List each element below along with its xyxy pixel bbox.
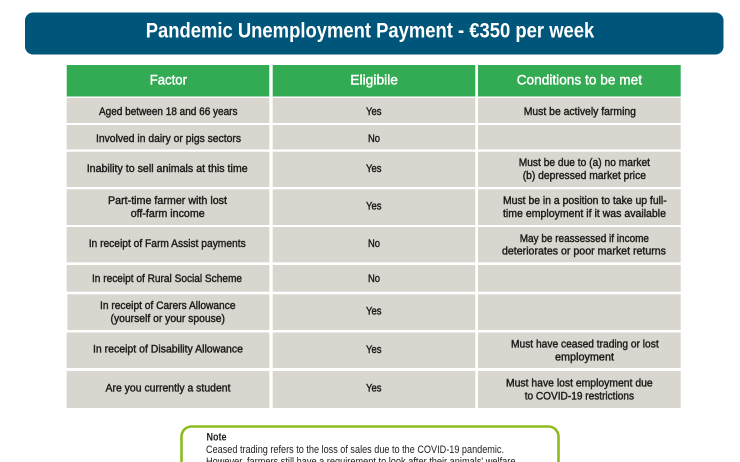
row: farm assist: No xyxy=(368,238,380,250)
row: farm assist: May be reassessed if income xyxy=(520,233,649,245)
row: student: to COVID-19 restrictions xyxy=(525,390,634,402)
eligibility table xyxy=(67,65,681,408)
row: rural social scheme xyxy=(67,265,681,292)
title banner xyxy=(25,12,724,54)
row: aged: Yes xyxy=(366,106,382,118)
note callout: Ceased trading refers to the loss of sales due to the COVID-19 pandemic. xyxy=(206,444,504,456)
row: student: Are you currently a student xyxy=(106,382,230,394)
row: aged xyxy=(67,98,681,123)
row: dairy or pigs: No xyxy=(368,133,380,145)
row: part-time farmer: Yes xyxy=(366,200,382,212)
table header row: Factor xyxy=(150,72,187,88)
row: dairy or pigs: Involved in dairy or pigs sectors xyxy=(96,133,241,145)
row: inability to sell: (b) depressed market price xyxy=(523,170,646,182)
row: inability to sell: Yes xyxy=(366,163,382,175)
row: inability to sell xyxy=(67,152,681,187)
row: inability to sell: Inability to sell animals at this time xyxy=(87,163,248,175)
row: aged: Aged between 18 and 66 years xyxy=(99,106,238,118)
row: carers allowance: (yourself or your spouse) xyxy=(110,313,225,325)
row: part-time farmer: Part-time farmer with lost xyxy=(108,195,227,207)
title banner: Pandemic Unemployment Payment - €350 per week xyxy=(146,20,595,43)
row: aged: Must be actively farming xyxy=(524,106,636,118)
row: disability allowance: Must have ceased trading or lost xyxy=(511,338,659,350)
row: student: Must have lost employment due xyxy=(506,378,653,390)
note callout: Note xyxy=(206,432,226,444)
note callout xyxy=(182,426,558,462)
table header row xyxy=(67,65,681,96)
row: dairy or pigs xyxy=(67,125,681,150)
row: part-time farmer: off-farm income xyxy=(131,208,205,220)
row: part-time farmer: time employment if it was available xyxy=(503,208,666,220)
row: rural social scheme: No xyxy=(368,273,380,285)
row: part-time farmer xyxy=(67,189,681,225)
row: farm assist xyxy=(67,227,681,262)
row: disability allowance: employment xyxy=(555,351,614,363)
row: carers allowance: In receipt of Carers Allowance xyxy=(100,300,236,312)
row: disability allowance: Yes xyxy=(366,344,382,356)
row: carers allowance: Yes xyxy=(366,306,382,318)
row: rural social scheme: In receipt of Rural Social Scheme xyxy=(92,273,242,285)
table header row: Conditions to be met xyxy=(517,72,642,88)
row: farm assist: In receipt of Farm Assist payments xyxy=(89,238,246,250)
table header row: Eligibile xyxy=(350,72,398,88)
row: carers allowance xyxy=(67,294,681,330)
row: farm assist: deteriorates or poor market returns xyxy=(502,246,666,258)
row: student: Yes xyxy=(366,382,382,394)
row: student xyxy=(67,371,681,408)
row: inability to sell: Must be due to (a) no market xyxy=(519,157,650,169)
row: disability allowance xyxy=(67,332,681,368)
row: part-time farmer: Must be in a position to take up full- xyxy=(503,195,667,207)
row: disability allowance: In receipt of Disability Allowance xyxy=(93,344,243,356)
